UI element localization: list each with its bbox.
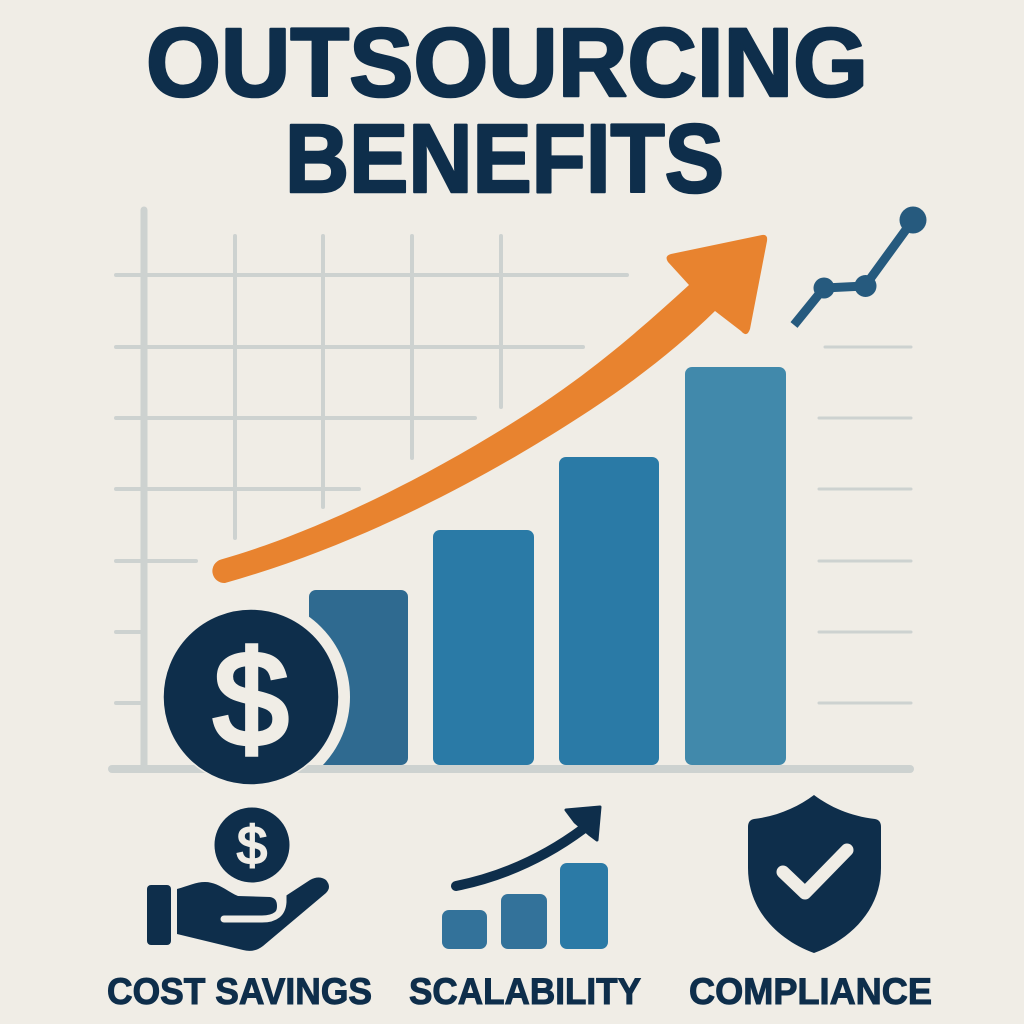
title [146,8,868,213]
chart: growth bar chart [112,206,926,796]
label: scalability: SCALABILITY [409,971,641,1012]
icon: hand holding coin: $ [237,816,267,876]
icon: large dollar coin [163,609,339,785]
label: compliance: COMPLIANCE [689,971,932,1012]
icon: hand holding coin [147,808,329,951]
x axis [112,765,910,773]
title: BENEFITS [285,104,724,213]
icon: rising bars and arrow [442,807,608,949]
growth arrow [212,235,767,583]
icon: small line chart [794,206,926,325]
benefit: cost savings [107,808,372,1012]
title: OUTSOURCING [146,8,868,117]
icon: shield with check [748,795,881,953]
bar 4 [685,367,786,765]
bar 3 [559,457,659,765]
label: cost savings: COST SAVINGS [107,971,372,1012]
benefit: compliance [689,795,932,1012]
benefit: scalability [409,807,641,1012]
bar 1 [309,590,408,765]
bar 2 [433,530,534,765]
icon: large dollar coin: $ [214,625,288,774]
coin halo [152,598,350,796]
chart gridlines [116,210,911,769]
